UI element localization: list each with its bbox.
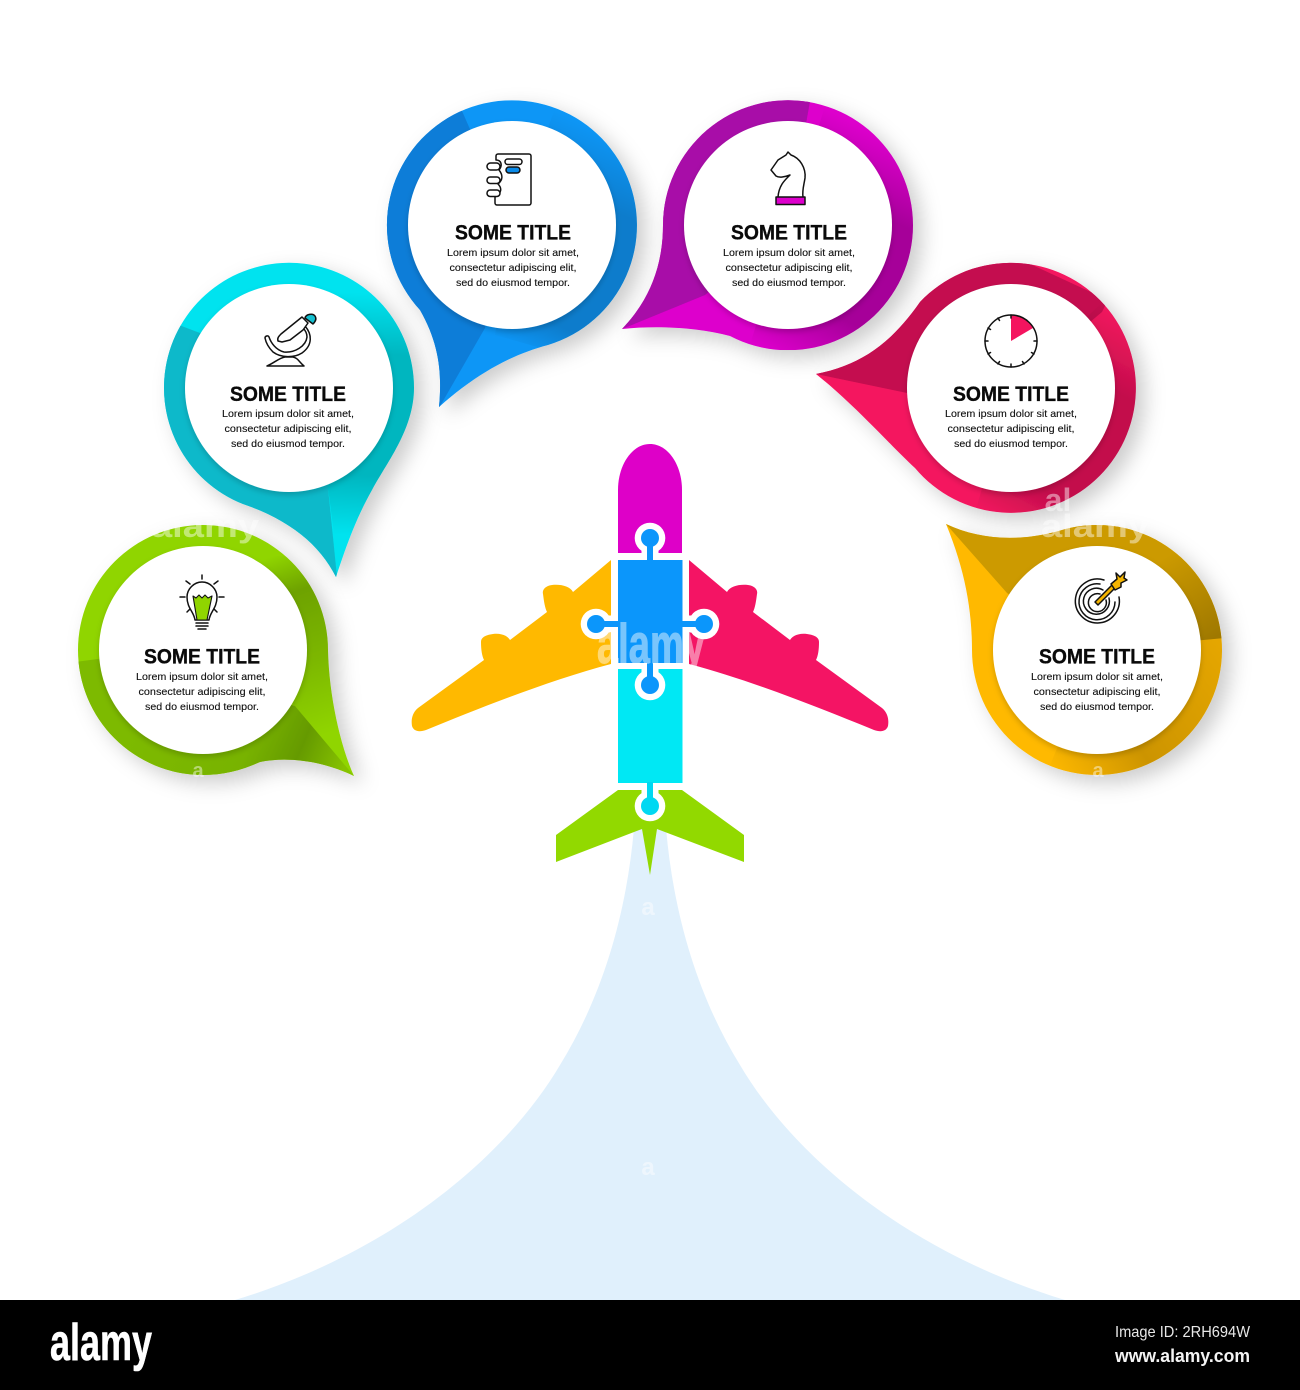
text block xyxy=(723,247,855,289)
text block: sed do eiusmod tempor. xyxy=(456,277,570,289)
icon: clock xyxy=(985,315,1037,367)
heading: SOME TITLE xyxy=(230,383,346,406)
icon: chess knight xyxy=(771,152,805,204)
white circle xyxy=(99,546,307,754)
watermarks: alamy xyxy=(1041,508,1149,544)
icon: light bulb xyxy=(180,575,224,629)
text block: sed do eiusmod tempor. xyxy=(231,438,345,450)
text block: sed do eiusmod tempor. xyxy=(954,438,1068,450)
white circle xyxy=(684,121,892,329)
website: www.alamy.com xyxy=(1114,1346,1250,1366)
plane rear body xyxy=(618,669,682,783)
footer bar xyxy=(0,1300,1300,1390)
panel: step 3 notes xyxy=(386,99,655,414)
watermarks: a xyxy=(192,760,204,782)
text block: consectetur adipiscing elit, xyxy=(1034,686,1160,698)
purple pin xyxy=(610,90,940,360)
watermarks: al xyxy=(1045,482,1071,518)
white circle xyxy=(185,284,393,492)
plane nose xyxy=(618,444,682,553)
text block: Lorem ipsum dolor sit amet, xyxy=(222,408,354,420)
plane tail xyxy=(556,790,744,875)
watermarks: a xyxy=(641,894,655,921)
green pin xyxy=(78,524,366,792)
footer logo: alamy xyxy=(50,1314,152,1372)
white circle xyxy=(907,284,1115,492)
watermarks: alamy xyxy=(151,508,259,544)
panel: step 1 idea xyxy=(78,524,366,792)
text block xyxy=(945,408,1077,450)
icon: microscope xyxy=(265,314,316,366)
watermarks: a xyxy=(641,1154,655,1181)
heading: SOME TITLE xyxy=(144,646,260,668)
plane right wing xyxy=(689,560,888,731)
image id: Image ID: 2RH694W xyxy=(1115,1324,1251,1341)
text block: Lorem ipsum dolor sit amet, xyxy=(1031,671,1163,683)
watermarks: a xyxy=(1092,760,1104,782)
heading: SOME TITLE xyxy=(455,222,571,244)
text block: consectetur adipiscing elit, xyxy=(948,423,1074,435)
watermarks: alamy xyxy=(597,612,705,675)
teal pin xyxy=(164,262,432,583)
text block: sed do eiusmod tempor. xyxy=(1040,701,1154,713)
crimson pin xyxy=(816,262,1154,530)
text block xyxy=(136,671,268,713)
panel: step 5 time xyxy=(816,262,1154,530)
text block: Lorem ipsum dolor sit amet, xyxy=(447,247,579,259)
panel: step 6 target xyxy=(940,500,1240,790)
heading: SOME TITLE xyxy=(1039,646,1155,668)
text block xyxy=(447,247,579,289)
text block: Lorem ipsum dolor sit amet, xyxy=(945,408,1077,420)
plane left wing xyxy=(412,560,611,731)
text block: sed do eiusmod tempor. xyxy=(732,277,846,289)
text block: Lorem ipsum dolor sit amet, xyxy=(136,671,268,683)
contrail xyxy=(235,828,1065,1300)
icon: target with dart xyxy=(1075,572,1127,623)
gold pin xyxy=(940,500,1240,790)
text block xyxy=(222,408,354,450)
text block: consectetur adipiscing elit, xyxy=(224,423,352,435)
rear body connector xyxy=(641,782,659,815)
text block xyxy=(1031,671,1163,713)
heading: SOME TITLE xyxy=(953,383,1069,406)
heading: SOME TITLE xyxy=(731,222,847,244)
puzzle joint cutouts xyxy=(581,523,719,821)
text block: consectetur adipiscing elit, xyxy=(726,262,852,274)
text block: consectetur adipiscing elit, xyxy=(138,686,266,698)
plane centre puzzle piece xyxy=(587,529,713,694)
blue pin xyxy=(386,99,655,414)
text block: consectetur adipiscing elit, xyxy=(450,262,576,274)
text block: sed do eiusmod tempor. xyxy=(145,701,259,713)
text block: Lorem ipsum dolor sit amet, xyxy=(723,247,855,259)
watermarks xyxy=(151,482,1149,1181)
airplane xyxy=(412,444,888,875)
icon: notebook xyxy=(487,154,531,205)
white circle xyxy=(993,546,1201,754)
white circle xyxy=(408,121,616,329)
panel: step 4 strategy xyxy=(610,90,940,360)
panel: step 2 research xyxy=(164,262,432,583)
